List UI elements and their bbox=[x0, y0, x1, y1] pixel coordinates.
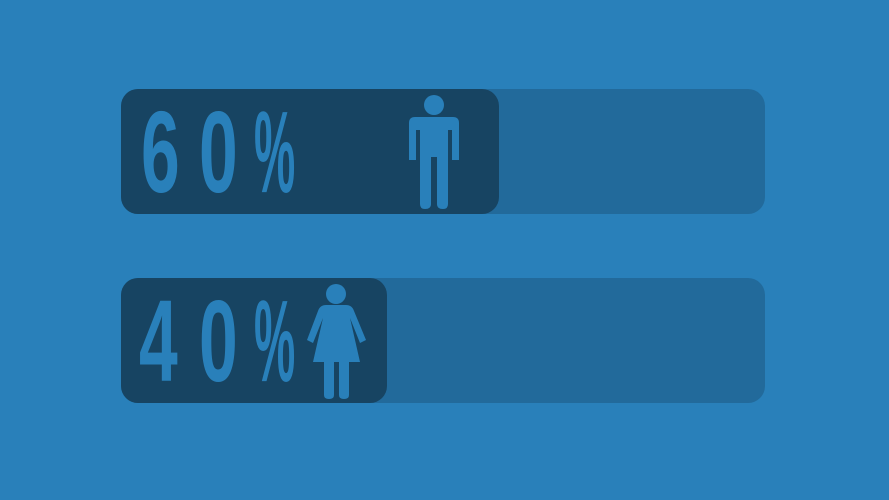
icon: man bbox=[409, 95, 459, 209]
label: 40%: 0 bbox=[199, 277, 238, 406]
label: 60%: 0 bbox=[199, 88, 238, 217]
label: 40%: % bbox=[254, 276, 295, 406]
label: 60% bbox=[141, 87, 295, 217]
bar: women 40% bbox=[121, 276, 765, 406]
label: 60%: % bbox=[254, 87, 295, 217]
track: women bbox=[121, 278, 765, 403]
label: 40% bbox=[139, 276, 295, 406]
icon: woman bbox=[307, 284, 366, 399]
fill: women bbox=[121, 278, 387, 403]
bar: men 60% bbox=[121, 87, 765, 217]
label: 40%: 4 bbox=[139, 277, 178, 406]
label: 60%: 6 bbox=[141, 88, 180, 217]
fill: men bbox=[121, 89, 499, 214]
track: men bbox=[121, 89, 765, 214]
